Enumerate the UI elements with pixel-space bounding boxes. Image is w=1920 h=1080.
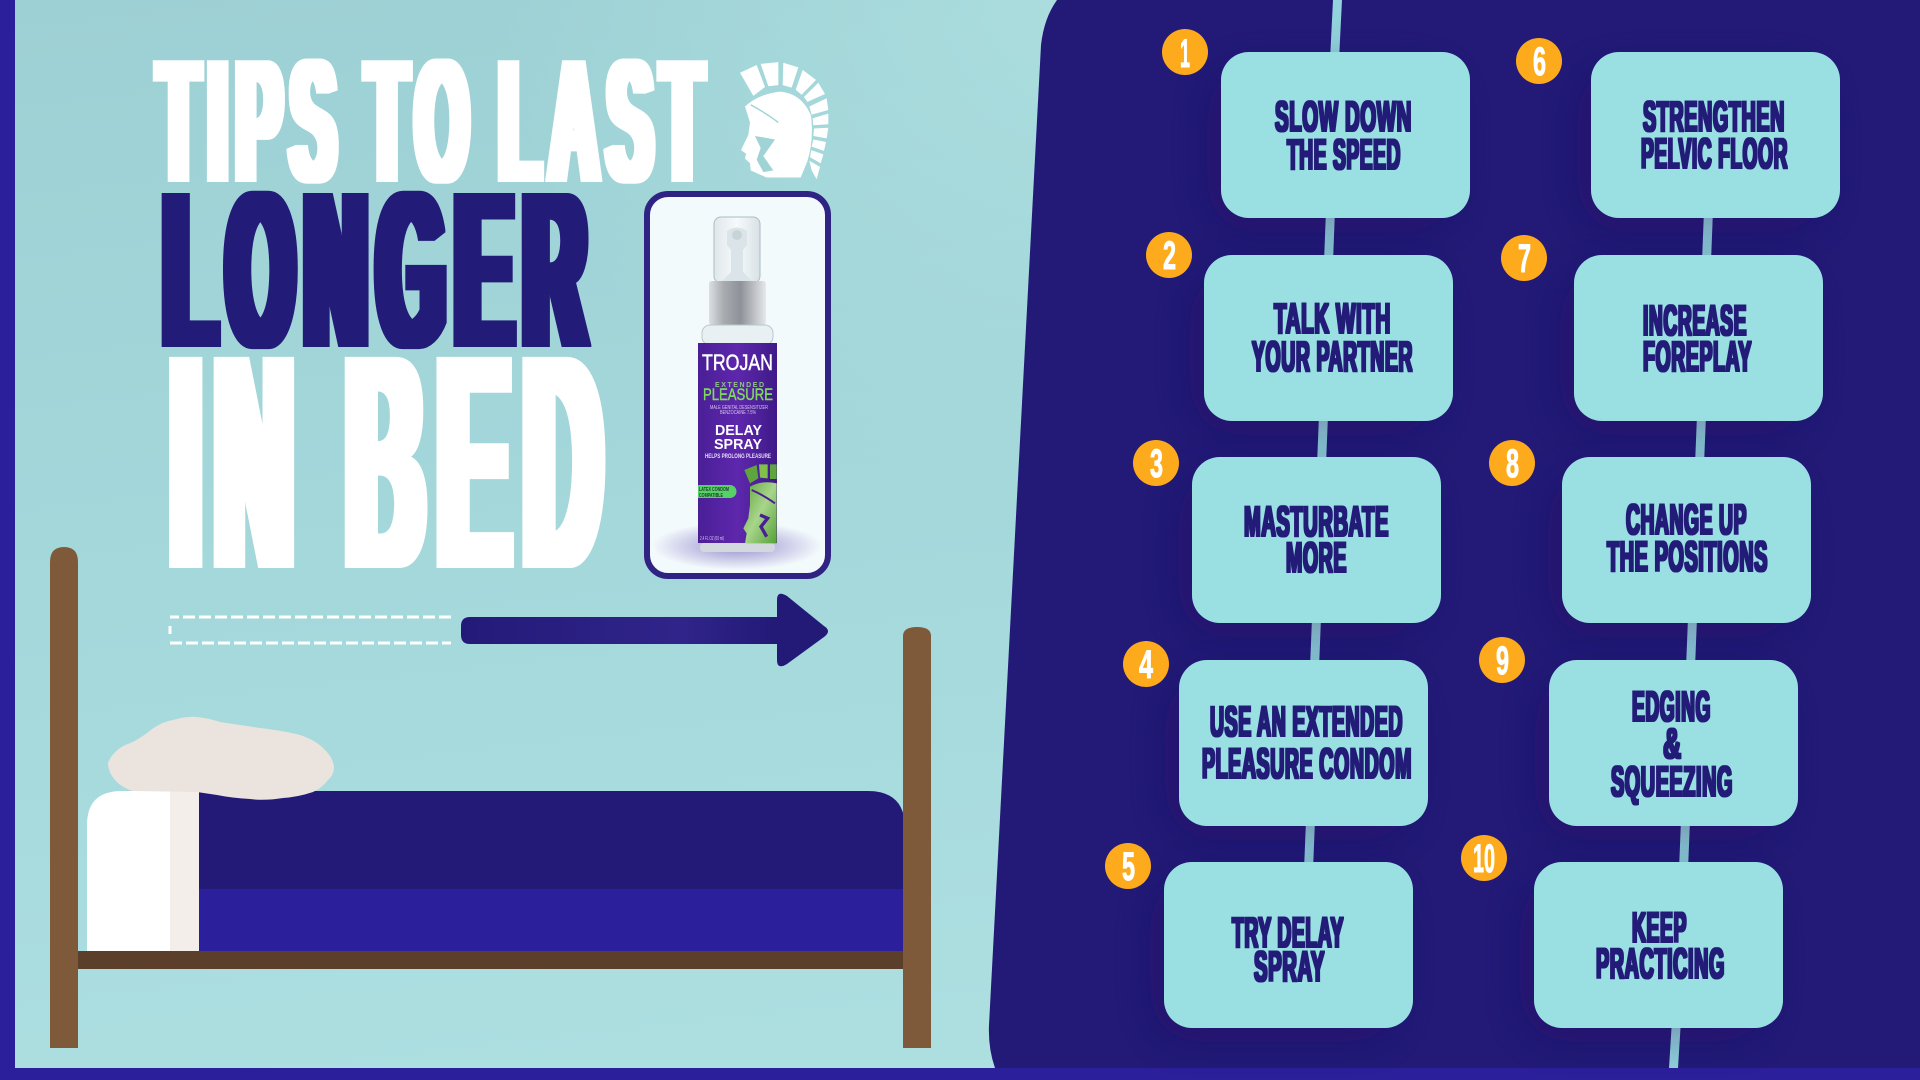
blanket: navy [199, 791, 905, 889]
tip 9: & [1663, 720, 1682, 768]
tip 3 [1133, 440, 1441, 623]
bed rail [78, 951, 904, 969]
spray bottle: 2.4 FL OZ (60 ml) [700, 536, 724, 542]
tip 3: MASTURBATE [1244, 498, 1389, 546]
compatibility pill [698, 485, 736, 499]
label text [702, 350, 773, 460]
tip 2: YOUR PARTNER [1252, 333, 1413, 381]
tip 10: 10 [1473, 837, 1495, 881]
bed illustration [50, 547, 931, 1048]
title [158, 23, 712, 632]
pillow [108, 717, 334, 800]
tip 7: 7 [1518, 237, 1531, 281]
tip 8: 8 [1506, 442, 1519, 486]
helmet graphic [743, 464, 777, 543]
tip 7: FOREPLAY [1643, 333, 1752, 381]
arrow [461, 594, 828, 666]
label text: EXTENDED [715, 382, 764, 389]
label text: HELPS PROLONG PLEASURE [705, 453, 771, 460]
tip 9: SQUEEZING [1611, 758, 1733, 806]
dashed outline arrow trail [170, 617, 451, 643]
spray bottle [698, 217, 777, 552]
left bedpost [50, 547, 78, 1048]
tip 10 [1461, 835, 1783, 1028]
tip 1: 1 [1180, 32, 1190, 76]
compatibility pill: LATEX CONDOM [699, 487, 729, 493]
sheet: fold edge [170, 791, 199, 951]
tip 9: EDGING [1632, 683, 1711, 731]
label text: MALE GENITAL DESENSITIZER [710, 405, 768, 411]
tip 1: SLOW DOWN [1275, 93, 1412, 141]
tip 2: TALK WITH [1274, 295, 1391, 343]
tip 8: CHANGE UP [1626, 496, 1747, 544]
tip 2: 2 [1163, 234, 1176, 278]
tip 10: PRACTICING [1596, 940, 1725, 988]
product card [647, 194, 828, 576]
panel: tips: PLEASURE CONDOM [1202, 740, 1412, 788]
tip 10: KEEP [1632, 904, 1687, 952]
label text: BENZOCAINE 7.5% [720, 410, 756, 416]
tip 5 [1105, 843, 1413, 1028]
tip 1 [1162, 29, 1470, 218]
tip 2 [1146, 232, 1453, 421]
text: IN BED [171, 293, 616, 632]
sheet: white fold [87, 791, 170, 951]
label text: DELAY [715, 422, 762, 439]
tip 8 [1489, 440, 1811, 623]
tip 6: 6 [1533, 40, 1546, 84]
tip 1: THE SPEED [1287, 131, 1401, 179]
tip 5: SPRAY [1254, 943, 1325, 991]
tip 3: 3 [1150, 442, 1163, 486]
text: LONGER [164, 146, 597, 393]
tip 7: INCREASE [1643, 297, 1747, 345]
blanket: blue [199, 889, 905, 951]
tip 9: 9 [1496, 639, 1509, 683]
bottle shadow [652, 522, 822, 570]
label text: SPRAY [714, 436, 762, 453]
tip 6 [1516, 38, 1840, 218]
text: TIPS TO LAST [158, 23, 712, 218]
tip 4 [1123, 641, 1428, 826]
panel: tips [989, 0, 1920, 1068]
tip 7 [1501, 235, 1823, 421]
tip 3: MORE [1286, 534, 1347, 582]
icon: trojan helmet logo [740, 62, 828, 179]
tip 5: 5 [1122, 845, 1135, 889]
tip 5: TRY DELAY [1232, 909, 1344, 957]
compatibility pill: COMPATIBLE [699, 493, 723, 499]
tip 9 [1479, 637, 1798, 826]
label text: TROJAN [702, 350, 773, 375]
connector lines [1304, 0, 1713, 1068]
right bedpost [903, 627, 931, 1048]
tip 4: USE AN EXTENDED [1210, 698, 1403, 746]
label text: PLEASURE [703, 385, 773, 404]
tip 4: 4 [1139, 643, 1153, 687]
